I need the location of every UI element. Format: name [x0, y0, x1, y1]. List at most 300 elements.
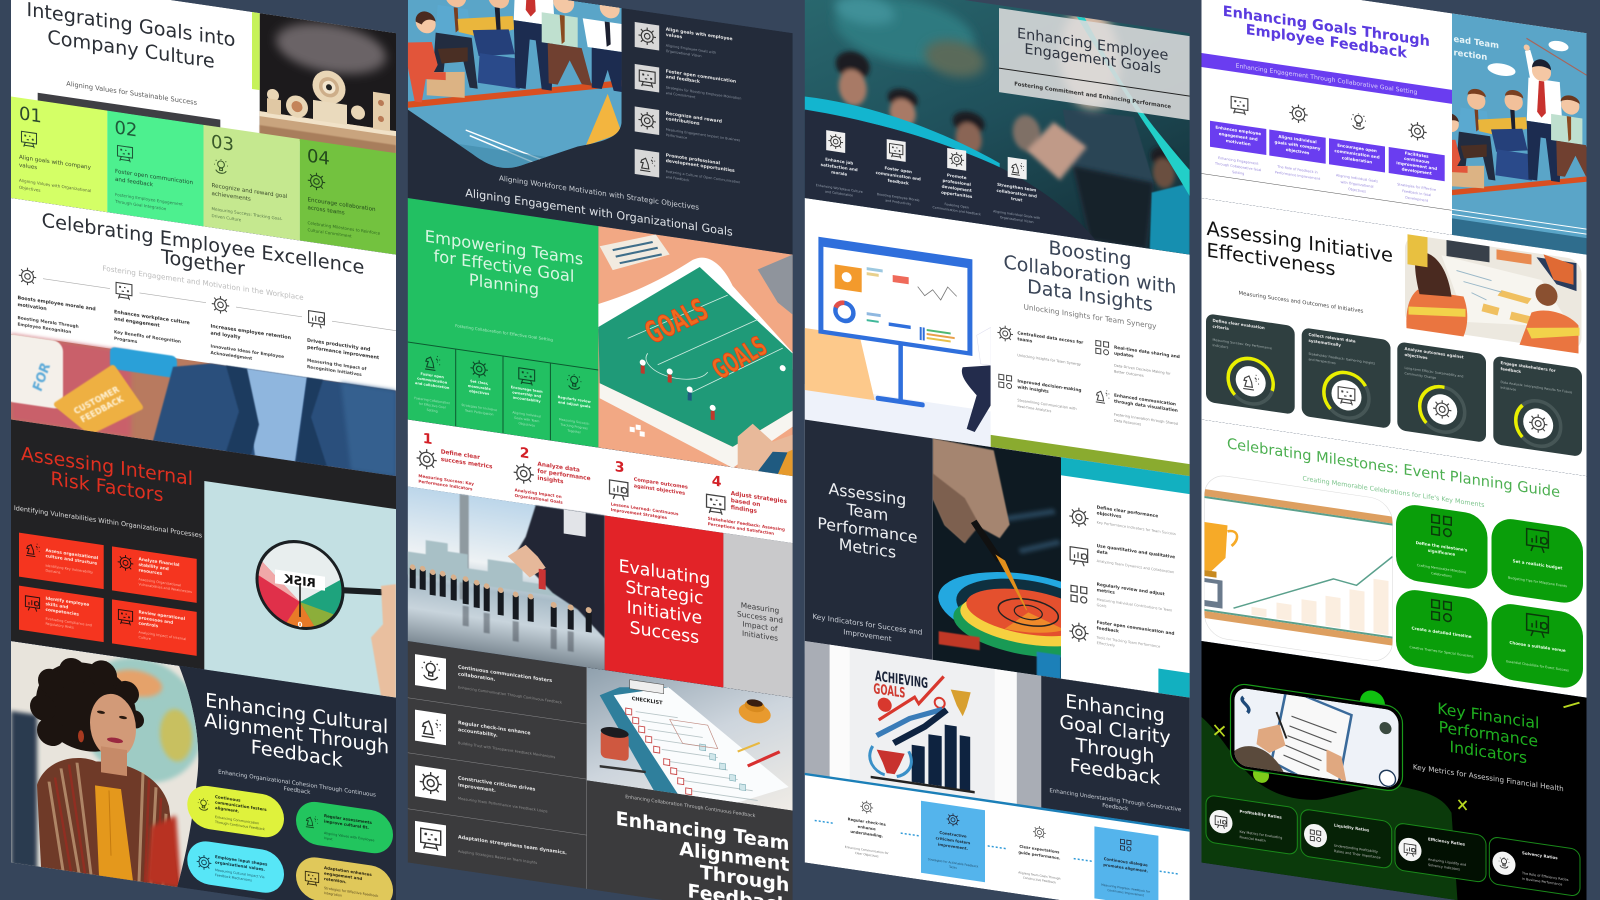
pill: adaptation: Adaptation enhances: [324, 865, 372, 877]
item: centralized data: teams: [1017, 336, 1033, 345]
title bar: [38, 93, 220, 128]
title: Alignment: [679, 837, 789, 876]
step: alignment: Aligns individual: [1278, 134, 1317, 145]
step cards: enhance: [858, 824, 876, 832]
title box: Engagement Goals: [1024, 41, 1161, 77]
card 04: 04: [307, 146, 330, 170]
step 3: Acknowledgment: [210, 350, 252, 362]
photo: customer feedback: [3, 331, 396, 477]
step cards: Continuous Improvement: [1107, 888, 1145, 898]
accent line: [805, 773, 1190, 832]
row: criticism: Measuring Team Performance via Feedback Loops: [458, 796, 548, 814]
slide: Evaluating Strategic Initiative Success: [408, 420, 793, 698]
illustration: lead team direction: ead Team: [1454, 35, 1499, 51]
grid of four steps: Objectives: [519, 421, 535, 428]
item 1: satisfaction and: [821, 162, 858, 172]
step cards: Clear Objectives: [855, 851, 879, 858]
footer band: [991, 435, 1190, 476]
pill: assessments: [296, 799, 393, 856]
step: alignment: The Role of Feedback in: [1276, 165, 1318, 175]
card: solvency: The Role of Efficiency Ratios: [1521, 871, 1569, 882]
step 1: Boosting Morale Through: [18, 315, 79, 330]
grid of four steps: measurable: [468, 384, 491, 391]
card 2: systematically: [1308, 338, 1341, 348]
step cards: Enhancing Communication for: [845, 845, 889, 855]
card 2: and Perspectives: [1308, 357, 1336, 365]
background blob: [1202, 717, 1458, 900]
column 2: [408, 0, 793, 900]
step 4: [707, 473, 787, 538]
step cards: Aligning Team Goals Through: [1018, 870, 1061, 881]
step cards: Measuring Progress: Feedback for: [1101, 883, 1151, 894]
row: objectives: [1069, 500, 1176, 541]
illustration: team on a boat: [408, 0, 622, 168]
accent bar: [252, 12, 260, 90]
step 3: [610, 458, 688, 523]
illustration: goals football pitch: GOALS: [639, 292, 714, 351]
pill: assessments: improve cultural fit.: [324, 819, 369, 830]
card 03: [204, 125, 300, 240]
item 1: Enhance job: [825, 157, 853, 166]
photo: customer feedback: CUSTOMER: [72, 385, 122, 417]
pill: communication: communication fosters: [215, 800, 267, 812]
row: communication: Enhancing Communication Through Continuous Feedback: [458, 685, 563, 705]
item 2: and Productivity: [885, 198, 911, 206]
grid of four steps: accountability: [513, 395, 541, 404]
title panel: Through: [1075, 733, 1154, 768]
card 01: values: [19, 163, 37, 171]
title: Through: [700, 861, 789, 897]
card 4: feedback: [1500, 366, 1521, 374]
card 03: Driven Culture: [212, 213, 242, 222]
row: feedback: Tools for Tracking Team Performance: [1096, 635, 1160, 649]
step 4: performance improvement: [307, 345, 380, 361]
pill: adaptation: Strategies for Effective Feedback: [324, 886, 378, 898]
card: profitability: Key Metrics for Evaluating: [1239, 830, 1282, 840]
card 3: [1397, 341, 1486, 443]
title panel: Evaluating: [619, 557, 710, 590]
card 01: Align goals with company: [19, 155, 92, 171]
title panel: Strategic: [625, 578, 703, 609]
item 3: opportunities: [941, 190, 973, 199]
title: Alignment Through: [204, 709, 389, 759]
step cards: Continuous dialogue: [1104, 856, 1148, 868]
step 2: [514, 444, 591, 509]
list: open communication: Foster open communication: [666, 68, 736, 85]
step cards: improvement.: [938, 842, 969, 851]
slide: Enhancing Goal Clarity Through Feedback: [805, 641, 1190, 900]
step 2: and engagement: [114, 316, 160, 329]
title panel: Performance: [817, 513, 917, 547]
slide: Aligning Engagement with Organizational Goals: [408, 0, 792, 254]
list: open communication: and feedback: [666, 74, 701, 85]
title panel: Feedback: [1070, 754, 1160, 790]
top band: [1061, 457, 1190, 494]
row: check-ins: Building Trust with Transparent Feedback Mechanisms: [458, 741, 555, 759]
item: real-time: Real-time data sharing and: [1114, 345, 1180, 360]
separators: [408, 641, 587, 889]
pill: communication: Through Continuous Feedback: [214, 820, 265, 831]
grid of four steps: Encourage team: [511, 385, 543, 394]
card: significance: Celebrations: [1431, 571, 1452, 578]
list: employee values: values: [666, 32, 682, 40]
list: employee values: Align goals with employee: [666, 26, 733, 42]
item 3: Promote: [947, 172, 967, 180]
list: employee values: Aligning Employee Goals with: [666, 43, 716, 55]
subtitle: Feedback: [284, 786, 311, 796]
pill: adaptation: retention.: [324, 876, 347, 884]
card 2: Stakeholder Feedback: Gathering Insights: [1308, 352, 1376, 366]
item 3: Fostering Open: [945, 202, 969, 210]
row: objectives: Define clear performance: [1097, 504, 1158, 520]
title panel: Initiative: [627, 598, 702, 629]
card 1: Define clear evaluation: [1212, 318, 1265, 330]
item 1: and Collaboration: [825, 190, 853, 198]
subtitle: Measuring Success and Outcomes of Initiatives: [1239, 290, 1364, 315]
card: profitability: [1206, 795, 1297, 855]
column 3: [805, 0, 1190, 900]
poster: achieving goals: ACHIEVING: [875, 668, 928, 692]
item 2: [876, 137, 921, 208]
card: processes: controls: [138, 620, 159, 629]
step cards: Clear expectations: [1019, 844, 1060, 855]
pill: adaptation: [296, 854, 393, 900]
step: engagement: Setting: [1232, 170, 1244, 176]
slide: Empowering Teams for Effective Goal Planning: [408, 198, 793, 477]
card 02: Through Goal Integration: [114, 199, 167, 211]
row: metrics: [1071, 578, 1173, 618]
item: decision-making: with insights: [1017, 384, 1049, 395]
row: adaptation: Adaptation strengthens team dynamics.: [458, 834, 567, 856]
item: decision-making: Streamlining Communication with: [1017, 398, 1077, 411]
card: significance: [1396, 502, 1488, 592]
card: processes: [112, 599, 197, 656]
title: Planning: [469, 270, 539, 299]
grid of four steps: Set clear,: [470, 379, 488, 386]
card: processes: processes and: [138, 615, 173, 626]
grid of four steps: Goals with Team: [514, 416, 539, 423]
title panel: Goal Clarity: [1059, 710, 1171, 749]
list: development: Promote professional: [666, 152, 721, 167]
grid of four steps: [408, 342, 598, 448]
item: centralized data: [997, 325, 1084, 367]
grid of four steps: Team Participation: [464, 408, 493, 417]
item 4: trust: [1011, 196, 1022, 203]
grid of four steps: Foster open: [421, 372, 444, 379]
list: development: and Feedback: [666, 175, 689, 182]
slide: Celebrating Milestones: [1202, 420, 1586, 698]
step: communication: Objectives: [1348, 187, 1366, 194]
card 2: Collect relevant data: [1308, 332, 1356, 344]
poster: achieving goals: GOALS: [873, 681, 905, 702]
item: real-time: Better Outcomes: [1114, 370, 1144, 378]
item: real-time: Data-Driven Decision Making for: [1114, 364, 1171, 376]
step 3: Lessons Learned: Continuous: [611, 501, 679, 516]
slide: Boosting Collaboration with Data Insights: [805, 198, 1190, 477]
row: metrics: Goals: [1097, 603, 1107, 608]
step: improvement: Feedback in Goal: [1402, 189, 1431, 197]
list: development: development opportunities: [666, 158, 735, 174]
step: engagement: Through Collaborative Goal: [1214, 161, 1261, 172]
card 1: [1206, 313, 1295, 415]
title box: Fostering Commitment and Enhancing Performance: [1014, 81, 1171, 110]
card: processes: Review operational: [138, 609, 186, 622]
step 1: motivation: [17, 302, 47, 312]
step 1: success metrics: [441, 457, 493, 471]
item: real-time: updates: [1114, 351, 1134, 359]
card: profitability: Profitability Ratios: [1239, 809, 1282, 820]
card: solvency: Solvency Ratios: [1522, 850, 1558, 860]
card 01: Objectives: [19, 185, 41, 193]
column 1: [3, 0, 396, 900]
step 2: Analyze data: [537, 462, 580, 474]
list: open communication: [634, 64, 742, 100]
list: employee values: [634, 22, 732, 58]
card 01: [11, 96, 107, 212]
subtitle: Fostering Collaboration for Effective Goal Setting: [455, 323, 553, 342]
pill: assessments: Input: [324, 836, 333, 841]
step 1: Measuring Success: Key: [418, 473, 474, 486]
pill: assessments: Regular assessments: [324, 813, 372, 825]
row: metrics: Regularly review and adjust: [1097, 581, 1165, 597]
title: Effectiveness: [1207, 239, 1336, 280]
card: liquidity: Liquidity Ratios: [1334, 823, 1370, 833]
step: improvement: [1389, 118, 1445, 205]
card 1: Measuring Success: Key Performance: [1212, 338, 1272, 350]
item 1: [816, 129, 863, 199]
item: decision-making: Real-Time Analytics: [1017, 404, 1051, 413]
card 04: across teams: [308, 205, 345, 217]
card 04: [300, 139, 396, 255]
slide: Assessing Initiative Effectiveness: [1202, 198, 1586, 476]
subtitle: Fostering Engagement and Motivation in the Workplace: [102, 263, 304, 302]
step: engagement: Enhances employee: [1215, 125, 1261, 136]
card 02: Foster open communication: [115, 169, 194, 186]
card: timeline: Creative Themes for Special Occasions: [1410, 645, 1474, 659]
item: visualization: Enhanced communication: [1114, 393, 1176, 408]
item 1: morale: [831, 169, 847, 177]
card: solvency: in Business Performance: [1522, 877, 1562, 887]
item: visualization: Fostering Innovation through Shared: [1114, 413, 1178, 426]
card: financial: [112, 546, 197, 603]
title: Data Insights: [1027, 275, 1153, 316]
row: check-ins: accountability.: [458, 727, 498, 739]
title: Together: [160, 245, 245, 280]
photo: smiling woman: [11, 639, 203, 894]
subtitle band: [1202, 53, 1452, 104]
photo: signing documents: [1230, 670, 1402, 806]
item: centralized data: Unlocking Insights for Team Synergy: [1017, 353, 1081, 367]
step 4: findings: [731, 505, 758, 515]
photo: pointing manager: [805, 0, 1190, 256]
title box: Enhancing Employee: [1017, 26, 1168, 64]
item 4: [993, 155, 1040, 225]
step: alignment: objectives: [1286, 147, 1310, 155]
list: development: [635, 148, 740, 190]
step 3: Increases employee retention: [210, 323, 292, 341]
item: visualization: [1096, 389, 1178, 432]
title panel: [805, 420, 933, 660]
row: metrics: metrics: [1097, 587, 1115, 596]
step 2: Analyzing Impact on: [515, 487, 562, 499]
step cards: criticism fosters: [936, 835, 971, 845]
slide: Celebrating Employee Excellence Together: [3, 197, 396, 477]
step: engagement: engagement and: [1219, 131, 1258, 142]
step 2: insights: [537, 476, 564, 485]
card: processes: Culture: [138, 635, 151, 641]
card 3: Long-term Effects: Sustainability and: [1404, 366, 1463, 379]
card: financial: Analyze financial: [138, 556, 180, 568]
corner square: [1158, 669, 1190, 698]
card 02: 02: [114, 117, 137, 142]
card 1: criteria: [1212, 324, 1229, 331]
illustration: goals football pitch: GOALS: [707, 332, 773, 386]
item 1: Enhancing Workplace Culture: [816, 183, 863, 194]
step 2: 2: [520, 445, 529, 462]
subtitle panel: [723, 533, 793, 698]
poster: achieving goals: [805, 641, 1041, 808]
card: liquidity: Understanding Profitability: [1334, 844, 1378, 854]
step: improvement: Facilitates: [1405, 150, 1429, 159]
grid of four steps: and collaboration: [415, 381, 450, 390]
step 1: Boosts employee morale and: [18, 295, 96, 313]
row: check-ins: [415, 710, 555, 761]
card 01: Aligning Values with Organizational: [19, 178, 91, 193]
pill: adaptation: engagement and: [324, 871, 362, 881]
row: criticism: [415, 765, 548, 816]
title panel: Key Indicators for Success and: [812, 612, 922, 637]
item 3: Communication and Feedback: [933, 205, 981, 216]
slide: Integrating Goals into Company Culture: [11, 0, 396, 255]
card 3: Community Change: [1404, 371, 1436, 380]
step 3: [210, 296, 302, 360]
step 4: Measuring the Impact of: [307, 358, 366, 372]
card: venue: Essential Checklists for Event Success: [1506, 659, 1569, 673]
step 4: Adjust strategies: [731, 491, 787, 505]
list: reward contributions: Performance: [666, 133, 687, 140]
card: budget: Budgeting Tips for Milestone Events: [1508, 576, 1567, 588]
item 4: collaboration and: [997, 188, 1037, 199]
list: open communication: Strategies for Boosting Employee Motivation: [666, 85, 741, 101]
step 4: Recognition Initiatives: [307, 364, 362, 378]
subtitle: Enhancing Organizational Cohesion Through Continuous: [218, 769, 376, 799]
row: communication: [415, 654, 563, 707]
step 3: against objectives: [634, 483, 685, 497]
card: skills: [19, 586, 104, 642]
title: Enhancing Goals Through: [1223, 4, 1430, 50]
step: engagement: motivation: [1226, 138, 1251, 147]
grid of four steps: Regularly review: [558, 395, 591, 404]
subtitle: Creating Memorable Celebrations for Life's Key Moments: [1303, 474, 1485, 509]
step 1: Employee Recognition: [18, 321, 71, 335]
illustration: team around plans: [1405, 234, 1582, 354]
title panel: Enhancing Understanding Through Constructive: [1049, 788, 1182, 813]
item: decision-making: Improved decision-making: [1017, 378, 1081, 394]
card 03: achievements: [212, 191, 251, 203]
row: data: [1070, 539, 1175, 580]
title: Collaboration with: [1004, 250, 1176, 299]
item: visualization: through data visualization: [1114, 399, 1178, 414]
title: Risk Factors: [51, 468, 163, 506]
subtitle: Enhancing Collaboration Through Continuous Feedback: [625, 794, 756, 819]
item 3: development: [942, 184, 972, 193]
title panel: Improvement: [843, 627, 892, 643]
step 3: and loyalty: [210, 330, 241, 341]
step cards: understanding.: [850, 829, 884, 839]
photo: risk magnifier: [204, 481, 396, 698]
step 4: based on: [731, 498, 760, 508]
title box: [999, 8, 1190, 120]
subtitle: Aligning Values for Sustainable Success: [66, 80, 198, 107]
step cards: Constructive Feedback: [1023, 876, 1056, 884]
card: skills: Evaluating Compliance and: [46, 617, 92, 627]
grid of four steps: ownership and: [512, 390, 542, 399]
title: Assessing Initiative: [1206, 217, 1393, 267]
wave: navy panel: [805, 110, 1097, 241]
step: improvement: Development: [1405, 196, 1429, 203]
photo: checklist on desk: CHECKLIST: [632, 696, 663, 707]
step cards: Constructive: [939, 830, 967, 839]
card: culture: [19, 533, 104, 589]
card: timeline: Create a detailed timeline: [1411, 625, 1472, 639]
item 4: Strengthen team: [997, 182, 1036, 193]
card 03: 03: [211, 132, 234, 156]
illustration: goals football pitch: [598, 226, 793, 477]
title: Key Financial: [1437, 699, 1539, 733]
column 4: [1202, 0, 1600, 900]
pill: input: organizational values.: [215, 860, 265, 872]
slide: Enhancing Employee Engagement Goals: [805, 0, 1190, 256]
grid of four steps: communication: [417, 376, 448, 385]
subtitle panel: Success and: [737, 609, 783, 625]
title panel: Team: [846, 500, 888, 525]
row: check-ins: Regular check-ins enhance: [458, 720, 531, 737]
card: culture: culture and structure: [46, 553, 97, 567]
step 1: 1: [423, 431, 432, 448]
step 2: Organizational Goals: [515, 493, 563, 505]
card 1: Indicators: [1212, 343, 1229, 349]
card: liquidity: Ratios and Their Importance: [1334, 849, 1381, 860]
card: efficiency: Solvency Indicators: [1428, 863, 1460, 872]
card 02: and feedback: [115, 177, 154, 188]
card: efficiency: Efficiency Ratios: [1428, 836, 1466, 847]
step cards: Strategies for Actionable Feedback: [928, 857, 979, 869]
pill: input: Measuring Cultural Impact Via: [215, 868, 265, 879]
step 1: Define clear: [441, 449, 480, 461]
step 4: 4: [712, 473, 722, 491]
row: adaptation: Adapting Strategies Based on Team Insights: [458, 849, 537, 865]
card: financial: Assessing Organizational: [138, 577, 181, 588]
card: financial: Vulnerabilities and Weaknesses: [138, 582, 192, 594]
photo: risk magnifier: 0: [298, 620, 303, 629]
step 2: for performance: [537, 469, 591, 482]
row: data: data: [1097, 549, 1108, 556]
pill: assessments: Aligning Values with Employee: [324, 831, 374, 842]
grid of four steps: Setting: [427, 408, 438, 413]
photo: checklist on desk: [587, 667, 793, 811]
step 1: [18, 268, 110, 334]
title: Indicators: [1450, 737, 1527, 767]
step 1: [417, 430, 493, 495]
item 2: Boosting Employee Morale: [877, 192, 919, 202]
card 02: Fostering Employee Engagement: [115, 192, 183, 207]
title panel: Enhancing: [1065, 689, 1165, 727]
item: real-time: [1096, 340, 1180, 383]
photo: wooden target blocks: [260, 13, 396, 155]
title: Empowering Teams: [425, 227, 583, 269]
grid of four steps: Strategies for Inclusive: [461, 403, 497, 412]
title panel: Metrics: [839, 535, 896, 562]
